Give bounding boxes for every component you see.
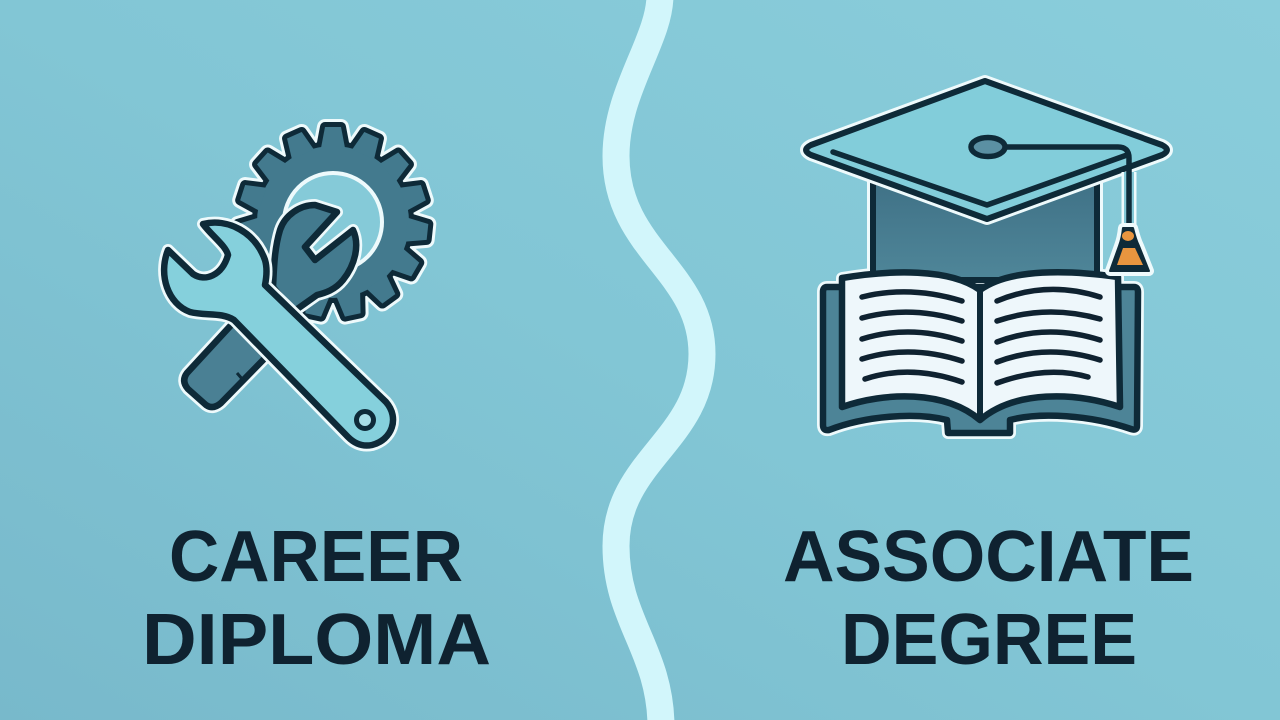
white sticker outline [823, 178, 1138, 433]
icon: open book [823, 272, 1138, 433]
heading: associate degree: ASSOCIATE [783, 517, 1194, 597]
heading: associate degree [783, 517, 1194, 680]
icon: tassel [1110, 228, 1149, 271]
wavy divider [616, 0, 702, 720]
icon: dark wrench [184, 205, 356, 407]
icon: cap board [806, 81, 1167, 228]
icon: light wrench [164, 223, 393, 446]
icon: gear [237, 127, 429, 317]
book text lines [862, 289, 1100, 383]
heading: career diploma [142, 517, 491, 680]
icon: graduation cap on open book [806, 81, 1167, 433]
icon: wrench and gear [164, 127, 429, 446]
heading: associate degree: DEGREE [841, 600, 1137, 680]
heading: career diploma: DIPLOMA [142, 600, 491, 680]
icon: cap body [873, 178, 1097, 280]
heading: career diploma: CAREER [169, 517, 463, 597]
